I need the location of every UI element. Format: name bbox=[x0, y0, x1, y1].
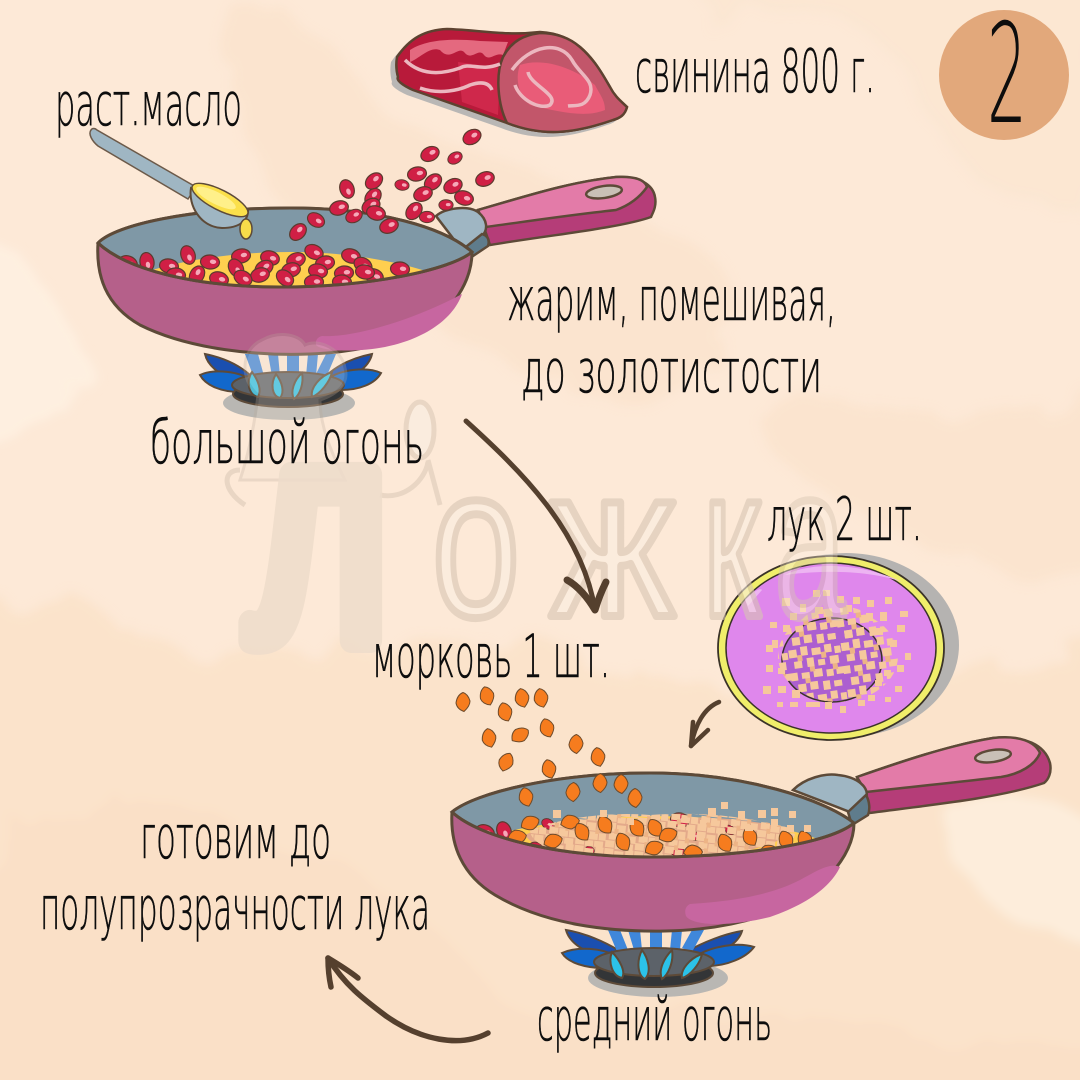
illustration: pan with vegetables bbox=[452, 737, 1051, 931]
а letter: а bbox=[775, 421, 845, 662]
second pan handle bbox=[793, 737, 1051, 825]
mascot arms and spoon bbox=[227, 402, 440, 505]
falling carrot pieces bbox=[456, 685, 642, 808]
illustration: burner, medium heat bbox=[562, 930, 754, 997]
pan highlight bbox=[316, 294, 462, 351]
step number badge bbox=[939, 0, 1069, 155]
text: fry line 2: до золотистости bbox=[521, 337, 822, 407]
Л letter: Л bbox=[248, 423, 388, 691]
arrow: to second step bbox=[466, 421, 606, 610]
falling pork pieces bbox=[286, 126, 496, 244]
watermark: Ложка with spoon mascot bbox=[227, 335, 845, 691]
pan interior bbox=[98, 208, 472, 287]
pan body bbox=[98, 208, 472, 354]
illustration: oil ladle bbox=[90, 128, 252, 228]
label: carrot: морковь 1 шт. bbox=[372, 622, 610, 692]
oil and pork in the pan bbox=[121, 244, 423, 286]
pork, onion and carrot in the pan bbox=[477, 802, 815, 856]
illustration: burner, high heat bbox=[200, 354, 381, 420]
о letter: о bbox=[432, 421, 520, 662]
label: oil: раст.масло bbox=[55, 70, 242, 140]
second pan body bbox=[452, 773, 854, 931]
label: onion: лук 2 шт. bbox=[767, 485, 922, 555]
arrow: to final text bbox=[328, 958, 488, 1041]
illustration: pan with frying pork bbox=[98, 177, 655, 354]
mascot head bbox=[240, 335, 346, 480]
text: cook line 1: готовим до bbox=[140, 803, 331, 873]
illustration: onion plate bbox=[718, 553, 959, 740]
falling oil drop bbox=[240, 219, 252, 239]
ж letter: ж bbox=[550, 421, 675, 662]
onion pieces on plate bbox=[763, 590, 911, 713]
text: cook line 2: полупрозрачности лука bbox=[40, 874, 430, 944]
illustration: raw pork piece bbox=[390, 29, 627, 137]
label: medium heat: средний огонь bbox=[537, 985, 772, 1055]
arrow: onion to pan bbox=[691, 702, 719, 746]
pan handle bbox=[436, 177, 655, 258]
second pan interior bbox=[452, 773, 854, 857]
к letter: к bbox=[703, 421, 761, 662]
second pan highlight bbox=[685, 866, 840, 924]
label: high heat: большой огонь bbox=[150, 408, 424, 478]
